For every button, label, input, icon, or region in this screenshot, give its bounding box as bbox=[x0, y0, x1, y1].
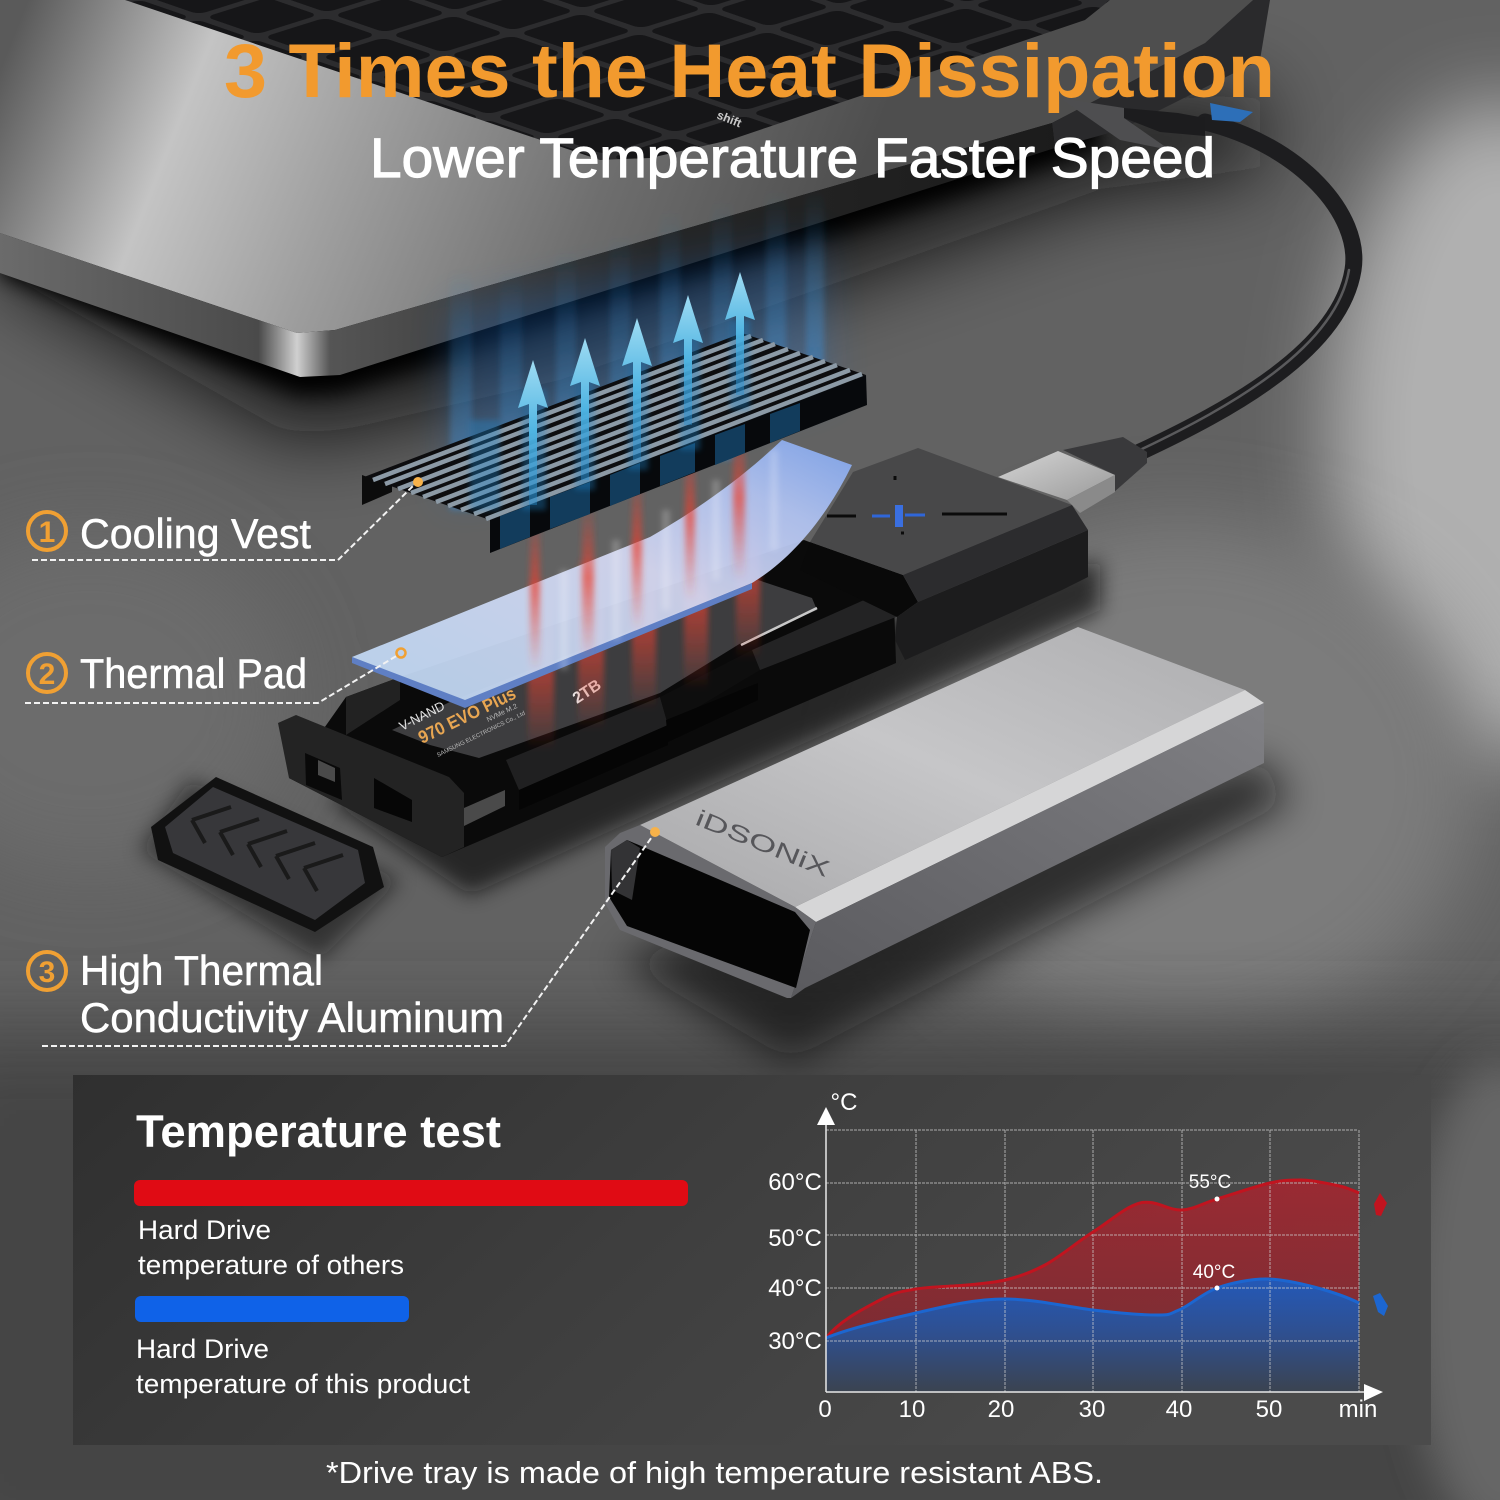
legend: others: temperature of others bbox=[138, 1250, 404, 1280]
axis labels: 0 bbox=[818, 1396, 832, 1423]
USB cable bbox=[1060, 98, 1354, 452]
data point: 55°C: 55°C bbox=[1189, 1172, 1231, 1193]
grid bbox=[826, 1130, 1359, 1392]
legend: this product bbox=[135, 1296, 471, 1399]
axis labels: 10 bbox=[899, 1396, 925, 1423]
axis labels: 50 bbox=[1256, 1396, 1282, 1423]
blue area bbox=[826, 1279, 1359, 1392]
axis labels: min bbox=[1339, 1396, 1377, 1423]
rubber end cap bbox=[140, 777, 400, 960]
callout 1: cooling vest: Cooling Vest bbox=[80, 510, 311, 557]
axis labels: 40 bbox=[1166, 1396, 1192, 1423]
blue curve bbox=[826, 1279, 1359, 1338]
panel: temperature test bbox=[73, 1075, 1431, 1445]
axis labels: 40°C bbox=[768, 1275, 822, 1302]
laptop bbox=[0, 0, 1270, 377]
axis labels: 30°C bbox=[768, 1328, 822, 1355]
legend: this product: Hard Drive bbox=[136, 1334, 269, 1364]
front rails bbox=[506, 592, 896, 810]
callout 1: cooling vest bbox=[28, 477, 423, 560]
blue heat haze bbox=[450, 190, 830, 530]
callout 2: thermal pad: Thermal Pad bbox=[80, 650, 307, 697]
subtitle: Lower Temperature Faster Speed bbox=[370, 126, 1215, 189]
laptop keyboard bbox=[125, 0, 1110, 160]
title: 3 Times the Heat Dissipation bbox=[224, 29, 1275, 114]
axis labels: °C bbox=[831, 1089, 857, 1116]
SSD: 970 EVO Plus bbox=[415, 683, 519, 748]
callout 3: high thermal conductivity aluminum: High Thermal bbox=[80, 947, 323, 994]
legend: others: Hard Drive bbox=[138, 1215, 271, 1245]
SSD: 2TB bbox=[570, 677, 605, 707]
red curve bbox=[826, 1180, 1359, 1338]
brand name: iDSONiX bbox=[692, 805, 834, 882]
tray body bbox=[289, 540, 896, 857]
enclosure tray with SSD bbox=[278, 437, 1147, 895]
USB plug bbox=[998, 437, 1147, 513]
callout 3: high thermal conductivity aluminum: Conductivity Aluminum bbox=[80, 994, 504, 1041]
callout 2: thermal pad bbox=[25, 648, 406, 703]
axis labels: 30 bbox=[1079, 1396, 1105, 1423]
callout 3: high thermal conductivity aluminum bbox=[28, 827, 660, 1046]
SSD bbox=[392, 580, 817, 759]
left end block bbox=[278, 715, 464, 857]
SSD: V-NAND bbox=[397, 698, 447, 734]
series end markers bbox=[1373, 1193, 1388, 1316]
axes bbox=[817, 1107, 1383, 1401]
callout 1: cooling vest: 1 bbox=[39, 516, 55, 549]
red heat columns bbox=[528, 490, 760, 750]
callout 2: thermal pad: 2 bbox=[39, 658, 55, 691]
panel heading: Temperature test bbox=[136, 1106, 501, 1157]
SSD: SAMSUNG ELECTRONICS Co., Ltd bbox=[436, 711, 526, 759]
SSD: NVMe M.2 bbox=[486, 703, 519, 724]
laptop keyboard: shift bbox=[715, 108, 744, 130]
axis labels: 60°C bbox=[768, 1169, 822, 1196]
axis labels bbox=[768, 1089, 1377, 1423]
thermal pad bbox=[352, 430, 852, 708]
legend: others bbox=[134, 1180, 688, 1280]
axis labels: 20 bbox=[988, 1396, 1014, 1423]
red area bbox=[826, 1180, 1359, 1392]
line chart: temperature over time bbox=[768, 1089, 1388, 1423]
footnote: *Drive tray is made of high temperature resistant ABS. bbox=[326, 1455, 1103, 1490]
hub block bbox=[800, 448, 1088, 660]
axis labels: 50°C bbox=[768, 1225, 822, 1252]
aluminum cover bbox=[605, 627, 1290, 1060]
heat sink: cooling vest bbox=[362, 320, 867, 553]
legend: this product: temperature of this product bbox=[136, 1369, 471, 1399]
callout 3: high thermal conductivity aluminum: 3 bbox=[39, 956, 55, 989]
heat arrows bbox=[518, 272, 755, 505]
data point: 40°C: 40°C bbox=[1193, 1262, 1235, 1283]
